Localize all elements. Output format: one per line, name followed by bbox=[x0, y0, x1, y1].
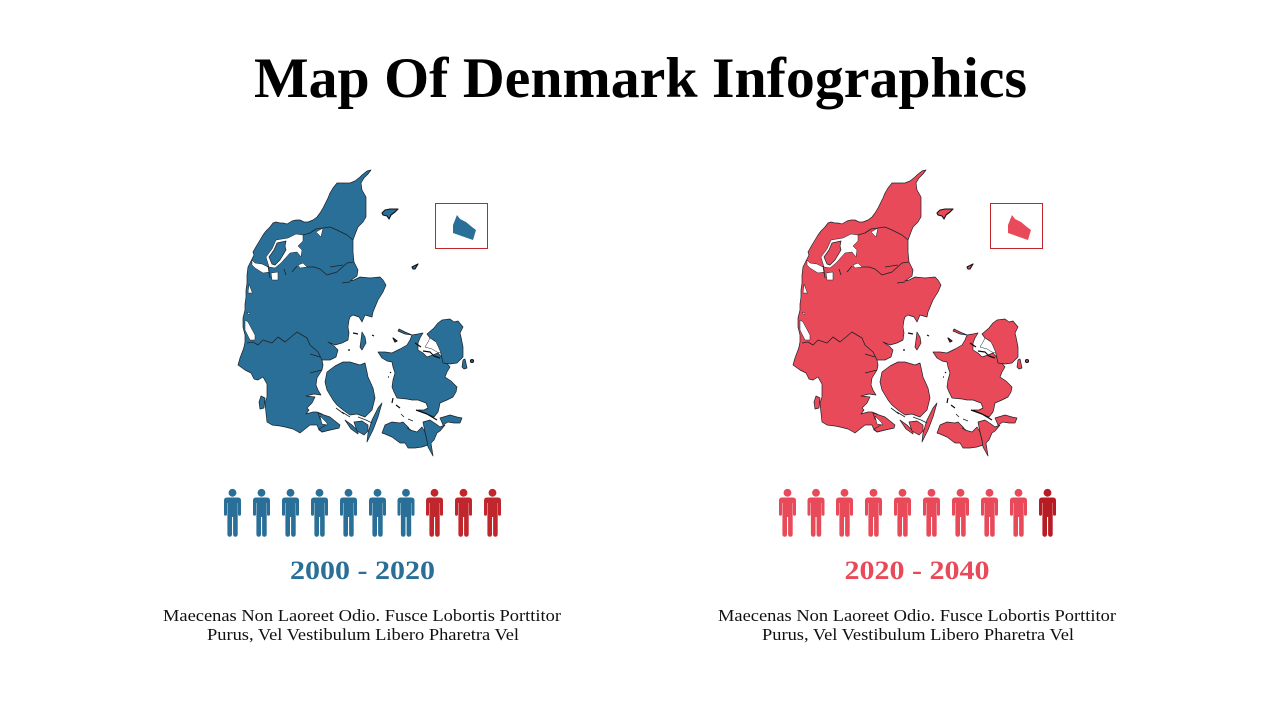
inset: Bornholm, red bbox=[990, 204, 1042, 248]
map of Denmark, blue bbox=[238, 170, 474, 456]
title: Map Of Denmark Infographics bbox=[254, 47, 1027, 110]
description: Maecenas Non Laoreet Odio. Fusce Lobortis Porttitor bbox=[163, 606, 562, 625]
inset: Bornholm, blue bbox=[436, 204, 488, 248]
description bbox=[163, 606, 562, 644]
description bbox=[718, 606, 1117, 644]
panel: 2020 - 2040 bbox=[718, 170, 1117, 644]
panel: 2000 - 2020 bbox=[163, 170, 562, 644]
heading: 2020 - 2040: 2020 - 2040 bbox=[844, 556, 990, 585]
pictogram row: 7 of 10 bbox=[224, 489, 501, 537]
map of Denmark, red bbox=[793, 170, 1028, 456]
heading: 2000 - 2020: 2000 - 2020 bbox=[290, 556, 435, 585]
description: Maecenas Non Laoreet Odio. Fusce Lobortis Porttitor bbox=[718, 606, 1117, 625]
description: Purus, Vel Vestibulum Libero Pharetra Vel bbox=[762, 625, 1074, 644]
pictogram row: 9 of 10 bbox=[779, 489, 1056, 537]
description: Purus, Vel Vestibulum Libero Pharetra Vel bbox=[207, 625, 519, 644]
